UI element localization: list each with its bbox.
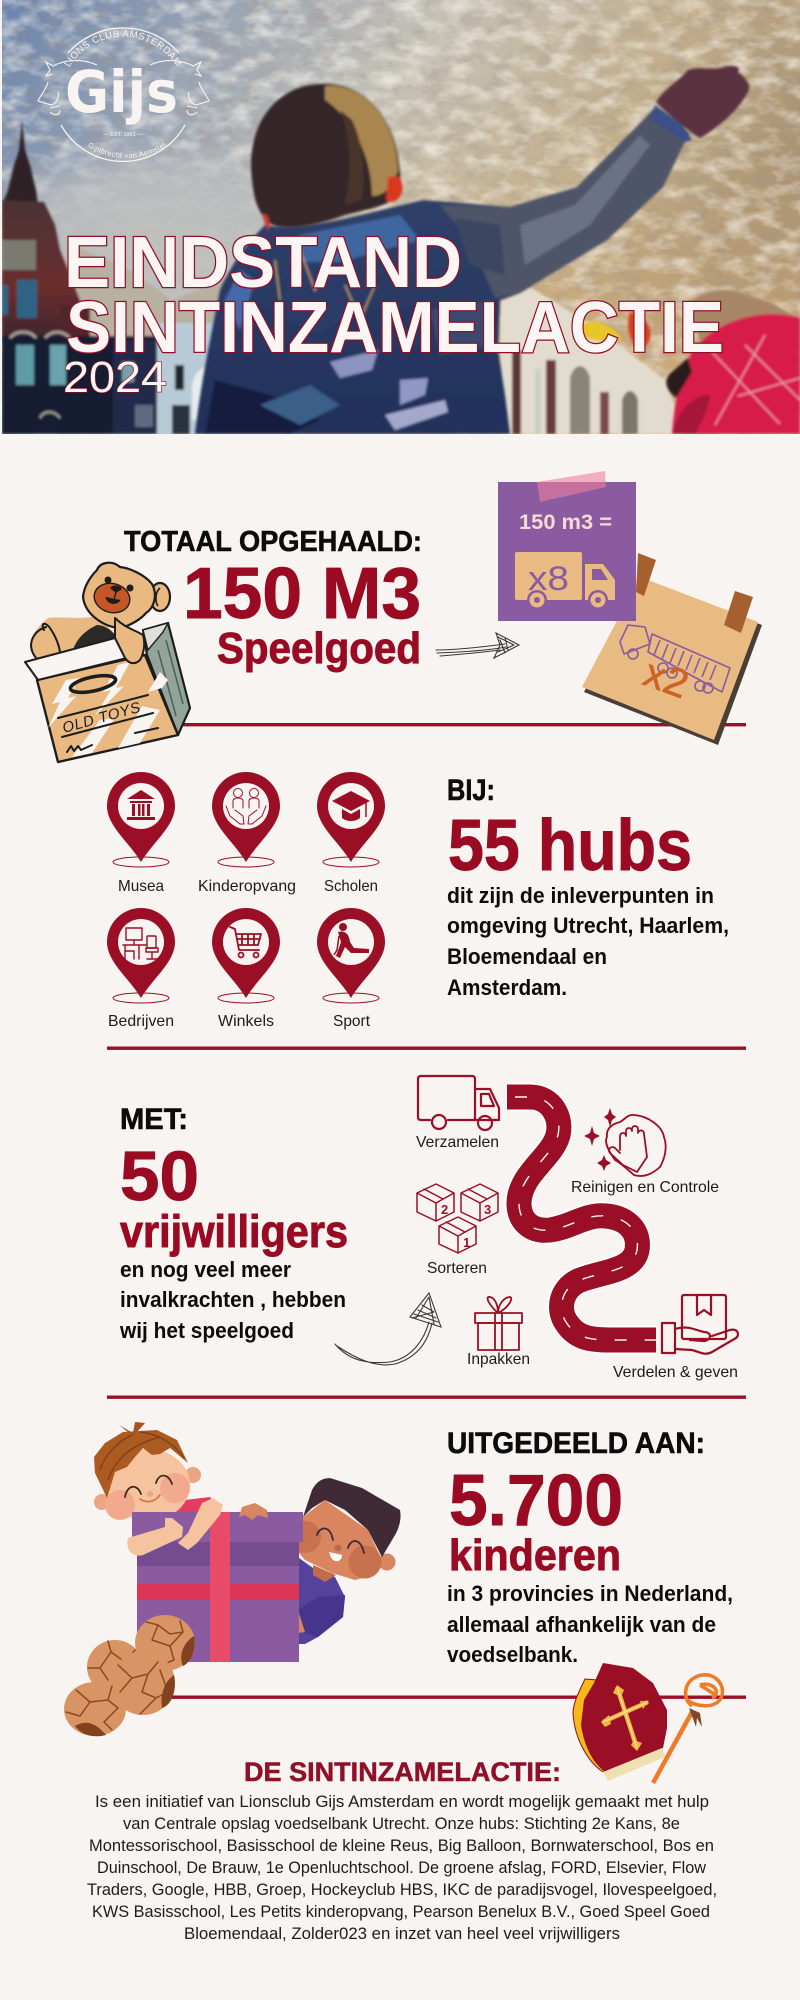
title (66, 234, 723, 354)
section 1 divider (107, 723, 746, 726)
camo patches (330, 350, 378, 378)
boy body (299, 1558, 345, 1644)
box flap (25, 638, 127, 680)
pin labels: Bedrijven (108, 1013, 174, 1030)
buildings right (500, 287, 685, 434)
child with raised arm (195, 66, 749, 434)
text: hubs description: Bloemendaal en (447, 944, 607, 969)
sleeve (440, 110, 689, 298)
logo Gijs (37, 27, 210, 162)
jacket (195, 110, 689, 434)
road dashes (507, 1097, 656, 1340)
mitre cross (601, 1685, 649, 1751)
icon: cleaning hand (606, 1115, 666, 1176)
girl face (125, 1476, 172, 1497)
mitre body (581, 1663, 667, 1772)
big number: 50: 50 (120, 1137, 199, 1215)
staff (653, 1675, 722, 1783)
cream roofline building (75, 248, 225, 338)
text: initiative description: Traders, Google, HBB, Groep, Hockeyclub HBS, IKC de paradijsvogel, Ilovespeelgoed, (87, 1880, 717, 1899)
box numbers: 1 (463, 1235, 470, 1250)
pin labels: Scholen (324, 878, 378, 895)
girl hair (94, 1430, 188, 1498)
boy hair (303, 1478, 401, 1557)
text: hubs description: omgeving Utrecht, Haarlem, (447, 913, 729, 938)
girl head (106, 1449, 190, 1521)
note paper (582, 577, 758, 740)
boy ear (378, 1554, 396, 1570)
text: children description: in 3 provincies in Nederland, (447, 1581, 733, 1606)
text: children description (447, 1581, 733, 1667)
text: hubs description (447, 883, 729, 1000)
logo arc text bottom: Gijsbrecht van Aemstel (88, 142, 166, 158)
pin: musea (107, 772, 175, 867)
illustration: kids with gift (94, 1422, 401, 1662)
toy box front (37, 655, 178, 762)
subheading: kinderen: kinderen (449, 1531, 621, 1580)
brick facade (2, 199, 82, 338)
note paper (498, 482, 636, 621)
note text: 150 m3 = (519, 511, 612, 534)
text: initiative description (87, 1792, 717, 1943)
tower (2, 120, 40, 204)
hair bow (119, 1422, 145, 1436)
gift lid (132, 1512, 303, 1542)
cookie bottom (64, 1682, 126, 1736)
big number: 150 M3: 150 M3 (183, 554, 421, 634)
raised hand (650, 66, 749, 142)
teddy back arm and body (31, 616, 122, 664)
label: Inpakken (467, 1351, 530, 1368)
icon: gift (475, 1297, 522, 1350)
dark lower block (2, 336, 157, 434)
logo arc text top: LIONS CLUB AMSTERDAM (64, 30, 182, 67)
title year: 2024 (63, 353, 167, 402)
heading: de sintinzamelactie: DE SINTINZAMELACTIE: (244, 1757, 561, 1787)
heading: met: MET: (120, 1103, 188, 1136)
cookie middle left (87, 1640, 143, 1694)
boy neck (313, 1565, 336, 1582)
cookie top (135, 1615, 195, 1671)
teddy body shadow (73, 625, 118, 650)
box ring (69, 672, 117, 696)
note: purple 150 m3 (498, 471, 636, 621)
text: children description: voedselbank. (447, 1642, 578, 1667)
box lines (58, 695, 158, 737)
icon: boxes (417, 1184, 498, 1253)
arrow: curved to process (335, 1293, 441, 1365)
heading: bij: BIJ: (447, 774, 495, 807)
tape pink (537, 471, 606, 502)
gift box (137, 1542, 299, 1662)
cookie middle right (111, 1651, 175, 1715)
process step: verdelen (613, 1295, 738, 1381)
icon: truck (418, 1076, 499, 1130)
sky with clouds (0, 0, 800, 434)
boy with dark hair (299, 1478, 401, 1644)
child in red coat (666, 290, 800, 434)
logo wordmark: Gijs (65, 58, 178, 126)
hair (251, 84, 402, 232)
big number: 5.700: 5.700 (449, 1461, 623, 1541)
girl shirt (173, 1497, 222, 1513)
road surface (507, 1097, 656, 1340)
icon: bishop mitre and staff (573, 1663, 722, 1783)
text: hubs description: dit zijn de inleverpunten in (447, 883, 714, 908)
gift shadow band (137, 1542, 299, 1566)
label: Verdelen & geven (613, 1364, 738, 1381)
text: initiative description: Is een initiatief van Lionsclub Gijs Amsterdam en wordt mogelijk gemaakt met hulp (95, 1792, 709, 1811)
process step: inpakken (467, 1297, 530, 1368)
boy face (317, 1528, 364, 1553)
toy box crumpled flap (143, 623, 168, 650)
text: initiative description: Duinschool, De Brauw, 1e Openluchtschool. De groene afslag, FORD, Elsevier, Flow (97, 1858, 707, 1877)
pin: sport (317, 908, 385, 1003)
toy box side (143, 623, 190, 735)
title line 1: EINDSTAND (64, 223, 462, 303)
logo est: — EST. 1961 — (103, 132, 143, 138)
arrow: to trucks (436, 633, 519, 658)
pin: winkels (212, 908, 280, 1003)
subheading: vrijwilligers: vrijwilligers (120, 1206, 348, 1257)
text: volunteers description (119, 1257, 346, 1343)
heading: uitgedeeld aan: UITGEDEELD AAN: (447, 1427, 705, 1460)
girl ears (94, 1494, 110, 1510)
icon: truck times 8: x8 (528, 560, 569, 598)
pale blue facade (157, 323, 219, 434)
pin labels: Kinderopvang (198, 878, 296, 895)
teddy front arm (115, 618, 144, 663)
box numbers: 3 (484, 1202, 491, 1217)
mitre base (603, 1748, 665, 1781)
pin labels: Sport (333, 1013, 371, 1030)
note: tan with semi truck (582, 553, 762, 745)
pin labels: Musea (118, 878, 164, 895)
icon: pepernoten cookies (64, 1615, 195, 1736)
boy hand (239, 1503, 268, 1520)
multiplier x2: x2 (638, 651, 694, 707)
panel: hubs pins (107, 772, 385, 1030)
boy arm (243, 1610, 305, 1647)
icon: semi truck (620, 625, 730, 693)
hero photo panel (2, 0, 800, 434)
pin labels: Winkels (218, 1013, 274, 1030)
tape left (636, 553, 656, 596)
side fold lines (158, 640, 183, 716)
teddy head (83, 563, 170, 628)
text: initiative description: KWS Basisschool, Les Petits kinderopvang, Pearson Benelux B.V., Goed Speel Goed (92, 1902, 710, 1921)
chart: process road (507, 1097, 656, 1340)
icon: teddy in toy box (25, 563, 190, 762)
label: Sorteren (427, 1260, 487, 1277)
text: initiative description: Bloemendaal, Zolder023 en inzet van heel veel vrijwilligers (184, 1924, 620, 1943)
boy head (299, 1500, 382, 1580)
heading: totaal opgehaald: TOTAAL OPGEHAALD: (124, 526, 422, 558)
gift ribbon horizontal (137, 1584, 299, 1600)
process step: verzamelen (416, 1076, 499, 1151)
box numbers (441, 1202, 491, 1250)
pin: scholen (317, 772, 385, 867)
collar ornaments (275, 250, 375, 320)
road outline (507, 1097, 656, 1340)
label: Reinigen en Controle (571, 1179, 719, 1196)
big number: 55 hubs: 55 hubs (448, 806, 692, 886)
text: children description: allemaal afhankelijk van de (447, 1612, 716, 1637)
section 4 divider (170, 1696, 746, 1699)
girl cheeks (105, 1490, 135, 1520)
box white streaks (48, 662, 168, 757)
text: initiative description: Montessorischool, Basisschool de kleine Reus, Big Balloon, Bornwaterschool, Bos en (89, 1836, 714, 1855)
mitre yellow edge (573, 1679, 610, 1773)
gift ribbon vertical (210, 1512, 230, 1662)
logo lions (38, 61, 209, 115)
box label: OLD TOYS (61, 699, 142, 737)
text: volunteers description: en nog veel meer (120, 1257, 291, 1282)
text: volunteers description: wij het speelgoed (119, 1318, 294, 1343)
pin: bedrijven (107, 908, 175, 1003)
boy sleeve (298, 1595, 345, 1637)
logo ring (61, 28, 185, 161)
note shadow (584, 580, 762, 745)
process step: reinigen (571, 1108, 719, 1196)
process step: sorteren (417, 1184, 498, 1277)
icon: hand with parcel (662, 1295, 738, 1354)
icon: truck times 8 (515, 552, 615, 610)
text: hubs description: Amsterdam. (447, 975, 567, 1000)
section 3 divider (107, 1396, 746, 1399)
title line 2: SINTINZAMELACTIE (66, 288, 724, 368)
text: volunteers description: invalkrachten , hebben (120, 1287, 346, 1312)
pin: kinderopvang (212, 772, 280, 867)
girl (94, 1422, 222, 1521)
subheading: speelgoed: Speelgoed (217, 624, 421, 673)
section 2 divider (107, 1046, 746, 1050)
text: initiative description: van Centrale opslag voedselbank Utrecht. Onze hubs: Stichting 2e Kans, 8e (123, 1814, 680, 1833)
icon: sparkles (584, 1108, 616, 1171)
boy cheeks (299, 1521, 382, 1578)
label: Verzamelen (416, 1134, 499, 1151)
girl arms (127, 1498, 223, 1556)
tape right (724, 591, 753, 633)
buildings left (2, 120, 225, 434)
box numbers: 2 (441, 1202, 448, 1217)
pin labels (108, 878, 378, 1030)
